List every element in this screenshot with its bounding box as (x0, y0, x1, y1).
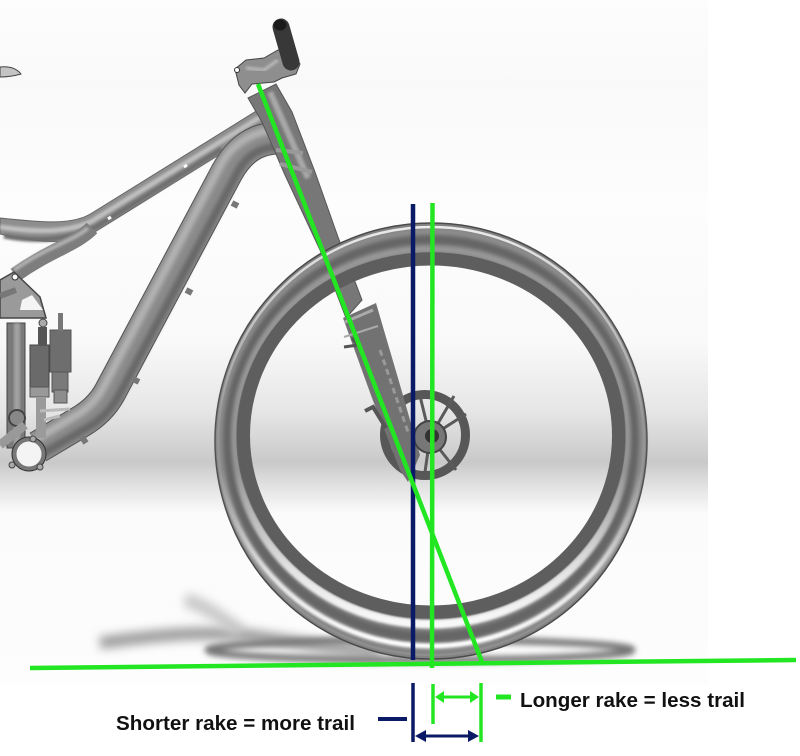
rear linkage and shock (0, 272, 71, 448)
tyre shading (220, 232, 642, 648)
seat stay brace (14, 228, 92, 275)
ground shadow (100, 600, 632, 660)
handlebar and stem (234, 20, 300, 93)
tyre body (215, 223, 647, 659)
steering axis line (258, 84, 482, 662)
label: longer rake: Longer rake = less trail (520, 690, 745, 712)
ground line (30, 660, 796, 668)
front wheel tyre (215, 223, 647, 659)
bike frame (0, 106, 285, 471)
down tube (35, 130, 285, 454)
lower highlights (219, 236, 643, 646)
longer rake vertical line (430, 203, 435, 668)
legend key: shorter rake (378, 717, 407, 721)
rim band (244, 259, 618, 612)
trail measurement guides (413, 683, 481, 742)
brake rotor (384, 394, 466, 476)
suspension fork (248, 84, 420, 482)
arrow: longer rake trail (435, 691, 479, 703)
wheel hub (414, 421, 446, 453)
shorter rake vertical line (411, 204, 415, 660)
label: shorter rake: Shorter rake = more trail (116, 713, 355, 735)
upper highlight (218, 227, 644, 655)
saddle (0, 67, 21, 77)
arrow: shorter rake trail (415, 730, 479, 742)
legend key: longer rake (496, 694, 511, 700)
bottom bracket (9, 436, 46, 471)
top tube (0, 106, 276, 242)
